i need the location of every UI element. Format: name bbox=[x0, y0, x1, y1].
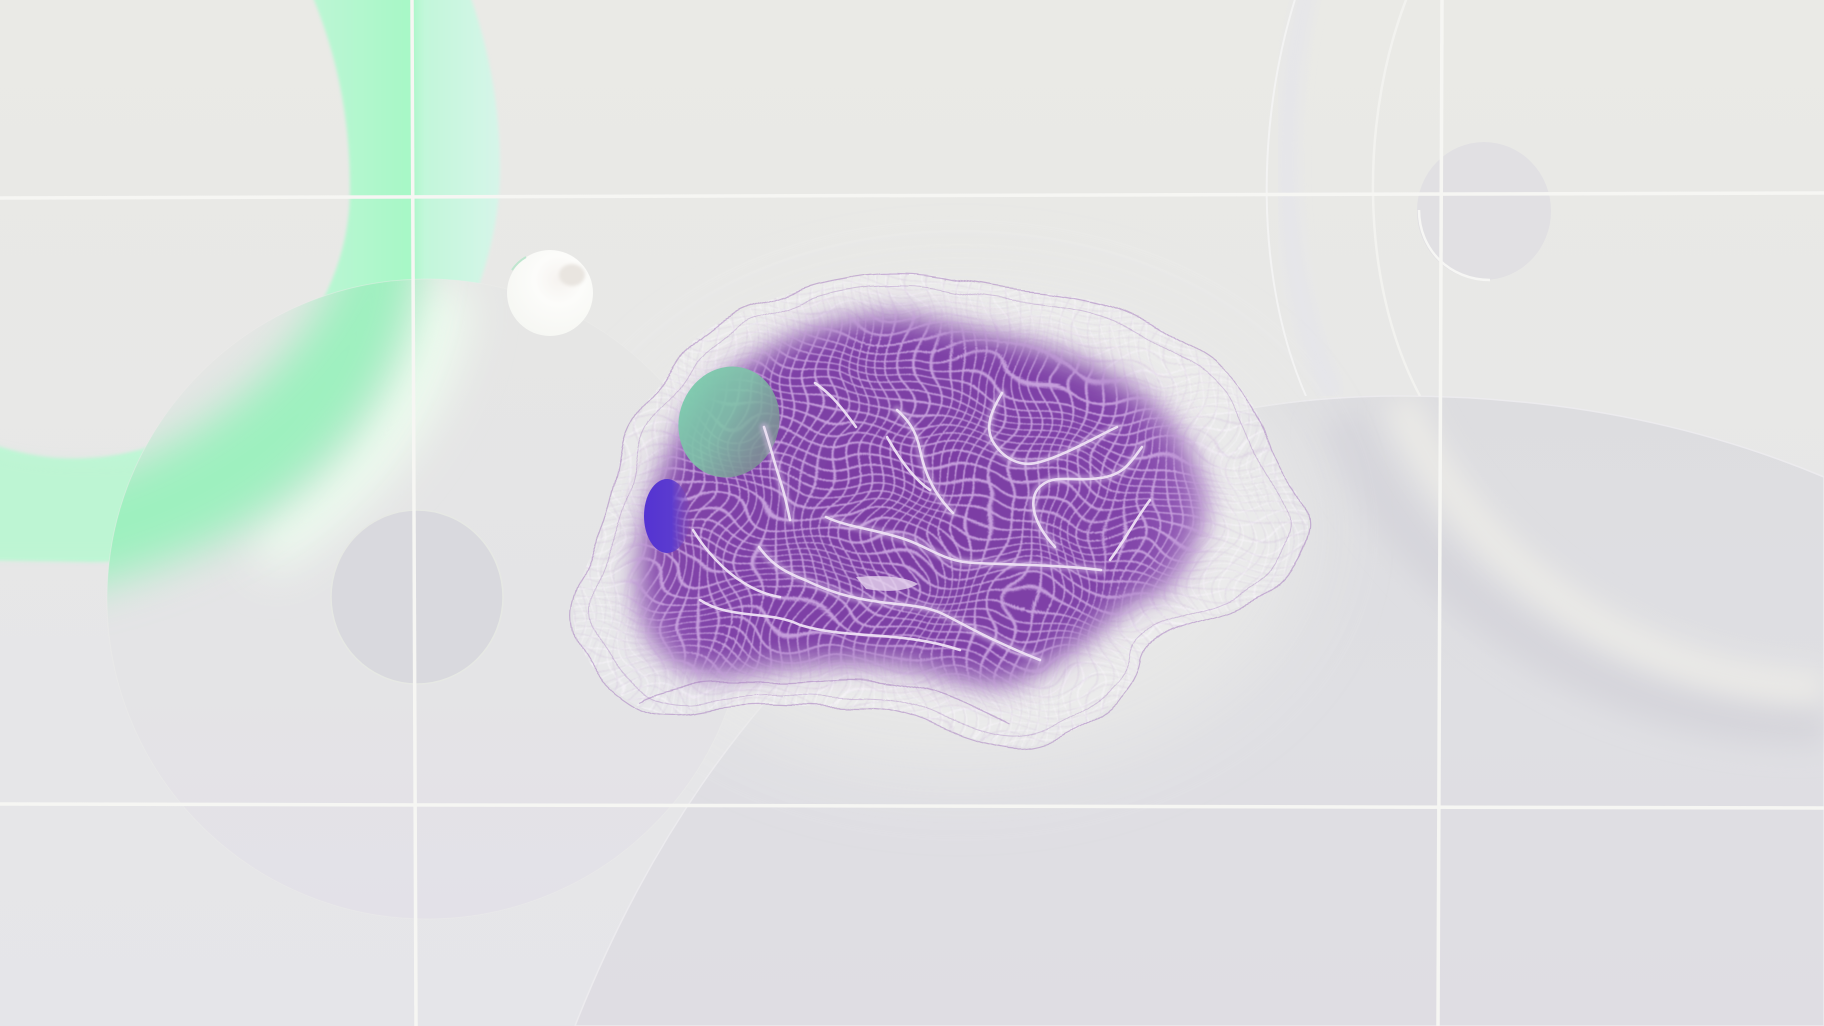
brain: green marker bbox=[664, 353, 794, 491]
brain: bright sulci folds bbox=[693, 383, 1150, 660]
brain: contour lines bbox=[573, 273, 1308, 747]
soft glow behind brain bbox=[610, 290, 1310, 770]
brain: fold shading bbox=[759, 393, 1142, 660]
brain bbox=[569, 272, 1312, 750]
brain: warped lilac mesh bbox=[627, 307, 1216, 694]
brain: outer mesh bbox=[574, 274, 1308, 748]
glass arcs, upper right bbox=[1267, 0, 1420, 396]
large disc, lower right bbox=[1284, 397, 1824, 778]
brain: translucent outer shell bbox=[573, 273, 1308, 747]
brain: purple core bbox=[638, 317, 1204, 683]
small disc, left bbox=[331, 510, 503, 684]
frosted lens disc, left bbox=[108, 278, 480, 612]
brain: lateral fold highlight bbox=[856, 576, 918, 591]
pearl sphere bbox=[507, 250, 593, 336]
small disc, right bbox=[1417, 142, 1551, 280]
brain: violet marker bbox=[644, 479, 690, 553]
green ring bbox=[0, 0, 500, 562]
